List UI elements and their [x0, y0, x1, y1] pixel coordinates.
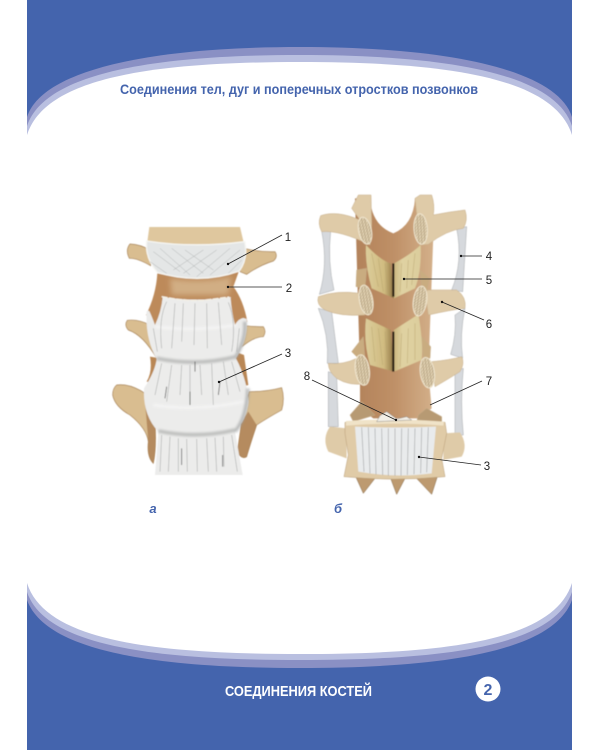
- page number badge: 2: [484, 682, 493, 699]
- ligament shading: [153, 322, 248, 435]
- leader dots: [218, 255, 462, 458]
- yellow ligaments: [365, 245, 422, 372]
- number labels: 2: [286, 283, 292, 295]
- number labels: 3: [484, 461, 490, 473]
- processes: [113, 227, 283, 463]
- page number badge: [476, 676, 500, 702]
- lower vertebra: [325, 412, 465, 494]
- number labels: 3: [285, 348, 291, 360]
- number labels: 4: [486, 251, 493, 263]
- ligament fibres: [153, 302, 240, 472]
- lower anterior longitudinal ligament: [144, 297, 249, 475]
- figure a: spine front view: [113, 227, 283, 475]
- footer heading: СОЕДИНЕНИЯ КОСТЕЙ: [225, 682, 372, 700]
- caption a: а: [149, 501, 157, 516]
- number labels: 7: [486, 376, 492, 388]
- title: Соединения тел, дуг и поперечных отростков позвонков: [120, 81, 478, 97]
- process shadows: [145, 402, 257, 463]
- brown wedges at the shoulders: [149, 297, 245, 325]
- number labels: 1: [285, 232, 291, 244]
- lateral ligaments: [318, 227, 467, 435]
- number labels: [285, 232, 493, 473]
- number labels: 8: [304, 371, 310, 383]
- leader lines: [219, 235, 484, 465]
- central bone column: [355, 198, 433, 418]
- figure b: spine rear view: [318, 195, 467, 494]
- upper and lateral processes: [318, 195, 466, 425]
- caption b: б: [334, 501, 343, 516]
- brown vertebra sides: [146, 270, 247, 332]
- number labels: 5: [486, 275, 492, 287]
- number labels: 6: [486, 319, 492, 331]
- upper disc ligament: [146, 241, 246, 278]
- articular cut surfaces: [353, 213, 436, 389]
- header band: [27, 0, 572, 140]
- footer band: [27, 570, 572, 750]
